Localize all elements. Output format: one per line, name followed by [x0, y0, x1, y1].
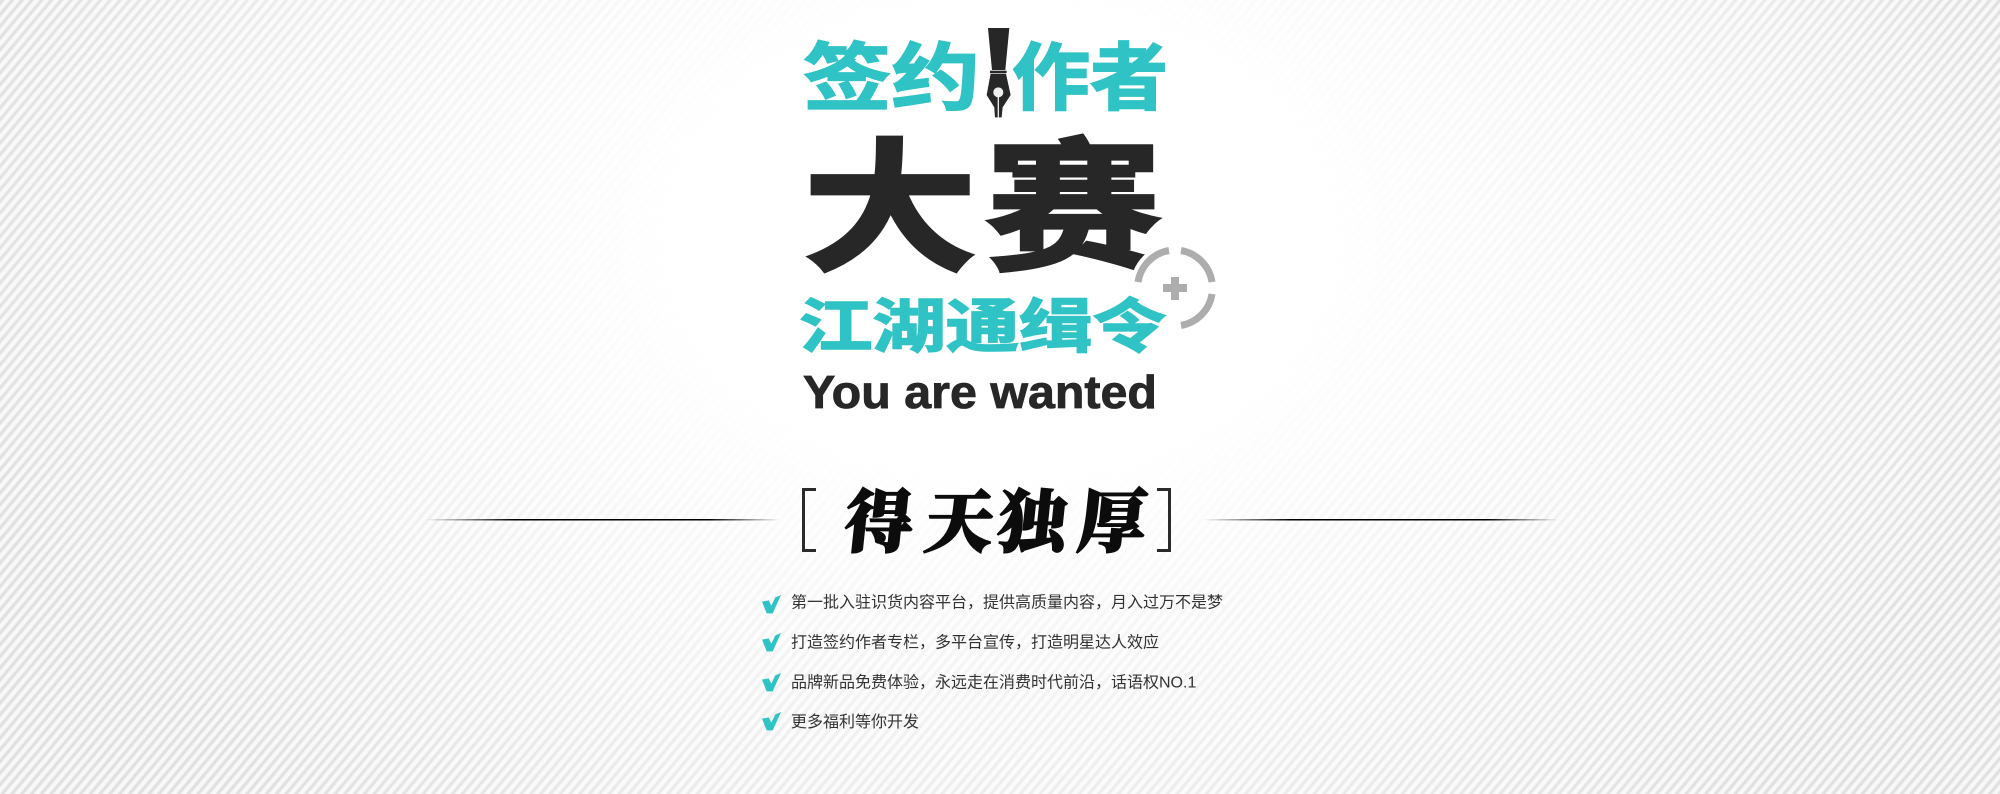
title line one: 签约作者: [803, 38, 1168, 120]
title line two: 大赛: [803, 130, 1162, 289]
right bracket: [1157, 490, 1170, 550]
title line two: 大赛: 赛: [985, 130, 1162, 289]
heading: 得天独厚: 天: [921, 485, 997, 561]
heading: 得天独厚: 厚: [1074, 485, 1150, 561]
heading: 得天独厚: 得: [841, 485, 917, 561]
benefit list: [762, 594, 1223, 731]
title line one: 签约作者: 作者: [1012, 38, 1168, 120]
divider left: [425, 519, 780, 520]
subtitle: You are wanted: You are wanted: [803, 366, 1157, 418]
benefit item four: 更多福利等你开发: [791, 713, 919, 731]
benefit item one: 第一批入驻识货内容平台，提供高质量内容，月入过万不是梦: [791, 594, 1223, 612]
title line three: 江湖通缉令: 江湖通缉令: [799, 295, 1166, 360]
left bracket: [804, 490, 816, 550]
icon: fountain pen exclamation mark: [987, 28, 1011, 117]
heading: 得天独厚: 独: [994, 485, 1078, 561]
heading: 得天独厚: [841, 485, 1150, 561]
benefit item two: 打造签约作者专栏，多平台宣传，打造明星达人效应: [791, 632, 1159, 652]
divider right: [1203, 519, 1558, 520]
title line two: 大赛: 大: [803, 130, 977, 289]
title line one: 签约作者: 签约: [803, 38, 980, 120]
benefit item three: 品牌新品免费体验，永远走在消费时代前沿，话语权NO.1: [791, 674, 1196, 692]
icon: dashed circle with plus: [1130, 243, 1220, 333]
